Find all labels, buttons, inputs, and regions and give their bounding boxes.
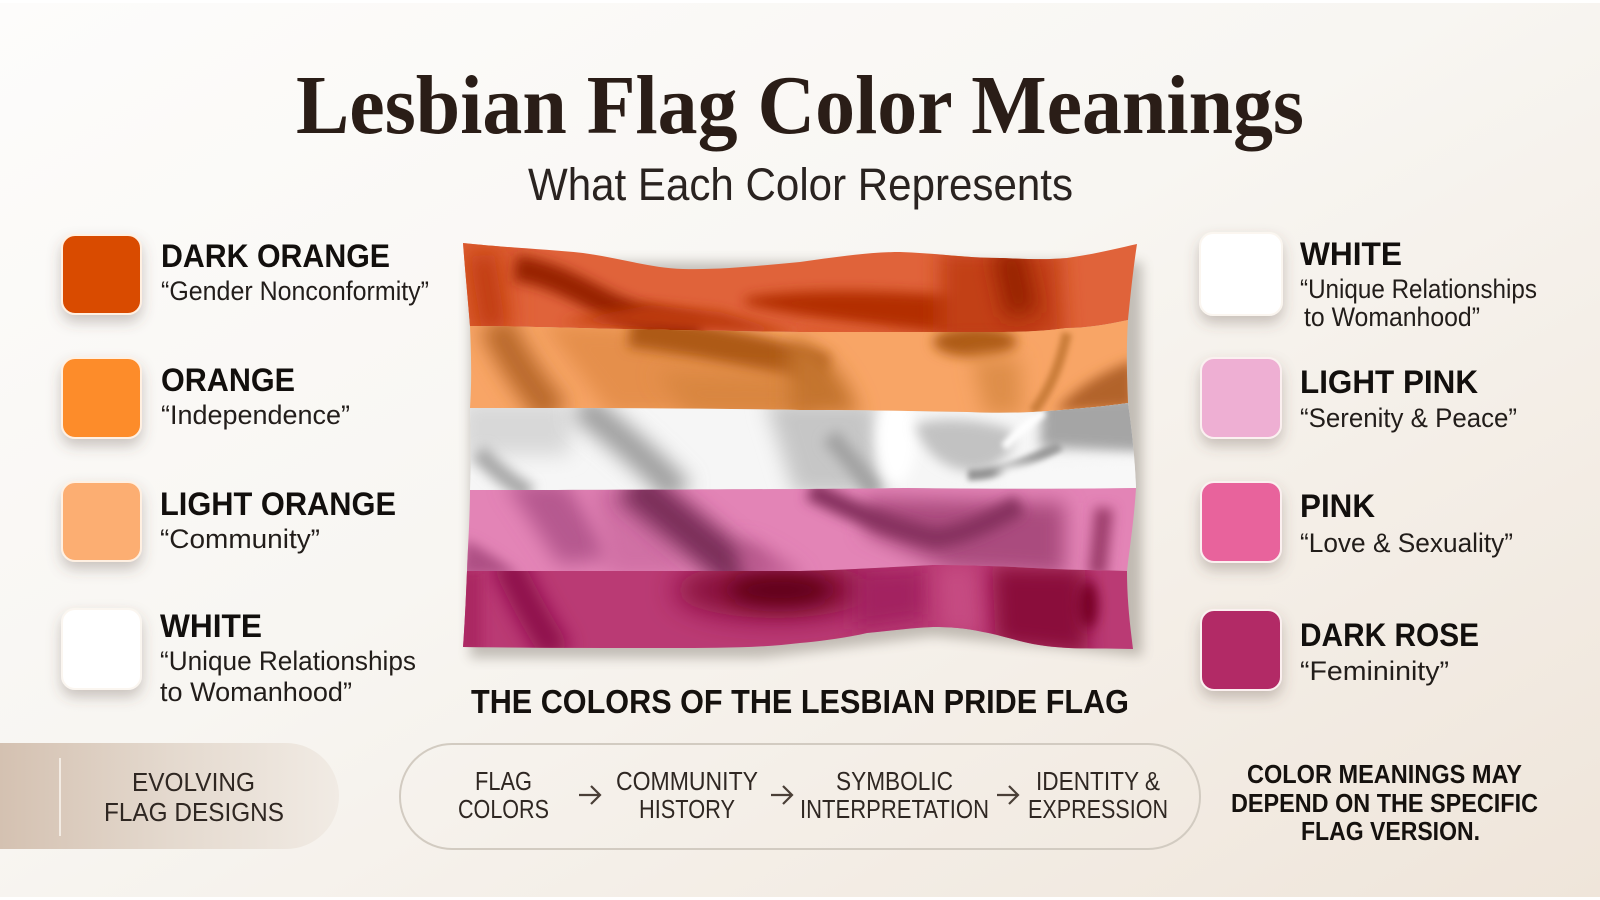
flag caption: THE COLORS OF THE LESBIAN PRIDE FLAG — [471, 683, 1129, 720]
label: dark rose — [1300, 617, 1479, 686]
stripe: dark rose — [463, 565, 1133, 649]
label: dark orange: DARK ORANGE — [161, 238, 390, 274]
panel: evolving flag designs — [0, 743, 339, 849]
label: light pink: LIGHT PINK — [1300, 364, 1478, 400]
label: white: to Womanhood” — [160, 677, 352, 707]
swatch: light orange — [62, 482, 141, 561]
stripe: dark orange — [463, 243, 1137, 332]
label: pink: “Love & Sexuality” — [1300, 528, 1513, 558]
label: orange: ORANGE — [161, 362, 295, 398]
step: flag colors — [458, 766, 549, 824]
step: community history — [616, 766, 758, 824]
label: white: to Womanhood” — [1304, 302, 1480, 332]
step: identity and expression: IDENTITY & — [1036, 766, 1160, 796]
label: pink: PINK — [1300, 488, 1375, 524]
label: dark orange — [161, 238, 429, 306]
swatch: white — [62, 609, 141, 689]
stripe: light orange — [470, 320, 1128, 413]
arrow — [997, 786, 1018, 804]
swatch: dark orange — [62, 235, 141, 314]
right legend — [1200, 233, 1537, 690]
swatch: orange — [62, 358, 141, 438]
label: white: WHITE — [1300, 236, 1402, 272]
label: white — [160, 608, 416, 707]
label: dark rose: “Femininity” — [1300, 656, 1449, 686]
label: light orange: LIGHT ORANGE — [160, 486, 396, 522]
panel: evolving flag designs: FLAG DESIGNS — [104, 797, 284, 827]
arrow — [771, 786, 792, 804]
label: dark rose: DARK ROSE — [1300, 617, 1479, 653]
step: symbolic interpretation: SYMBOLIC — [836, 766, 953, 796]
title: Lesbian Flag Color Meanings — [296, 59, 1304, 152]
panel: evolving flag designs: EVOLVING — [132, 767, 255, 797]
swatch: dark rose — [1201, 610, 1281, 690]
step: flag colors: COLORS — [458, 794, 549, 824]
label: orange — [161, 362, 350, 430]
label: white — [1300, 236, 1537, 332]
left legend — [62, 235, 429, 707]
step: symbolic interpretation: INTERPRETATION — [800, 794, 989, 824]
step: community history: HISTORY — [639, 794, 735, 824]
note: DEPEND ON THE SPECIFIC — [1231, 788, 1538, 818]
stripe: white — [470, 403, 1136, 490]
step: symbolic interpretation — [800, 766, 989, 824]
swatch: pink — [1201, 482, 1281, 562]
note: COLOR MEANINGS MAY — [1247, 759, 1522, 789]
panel: process flow — [400, 744, 1200, 849]
swatch: light pink — [1201, 358, 1281, 438]
step: flag colors: FLAG — [475, 766, 532, 796]
label: light pink: “Serenity & Peace” — [1300, 403, 1517, 433]
stripe: pink — [467, 488, 1136, 571]
step: identity and expression: EXPRESSION — [1028, 794, 1168, 824]
flag shadow — [470, 262, 1142, 658]
step: community history: COMMUNITY — [616, 766, 758, 796]
subtitle: What Each Color Represents — [528, 159, 1073, 210]
note: FLAG VERSION. — [1301, 816, 1480, 846]
note — [1231, 759, 1538, 846]
flag illustration — [450, 230, 1150, 658]
label: light orange: “Community” — [160, 524, 320, 554]
label: dark orange: “Gender Nonconformity” — [161, 276, 429, 306]
label: orange: “Independence” — [161, 400, 350, 430]
label: white: “Unique Relationships — [1300, 274, 1537, 304]
label: light pink — [1300, 364, 1517, 433]
arrow — [579, 786, 600, 804]
label: white: “Unique Relationships — [160, 646, 416, 676]
label: pink — [1300, 488, 1513, 558]
label: white: WHITE — [160, 608, 262, 644]
step: identity and expression — [1028, 766, 1168, 824]
label: light orange — [160, 486, 396, 554]
swatch: white — [1200, 233, 1282, 315]
